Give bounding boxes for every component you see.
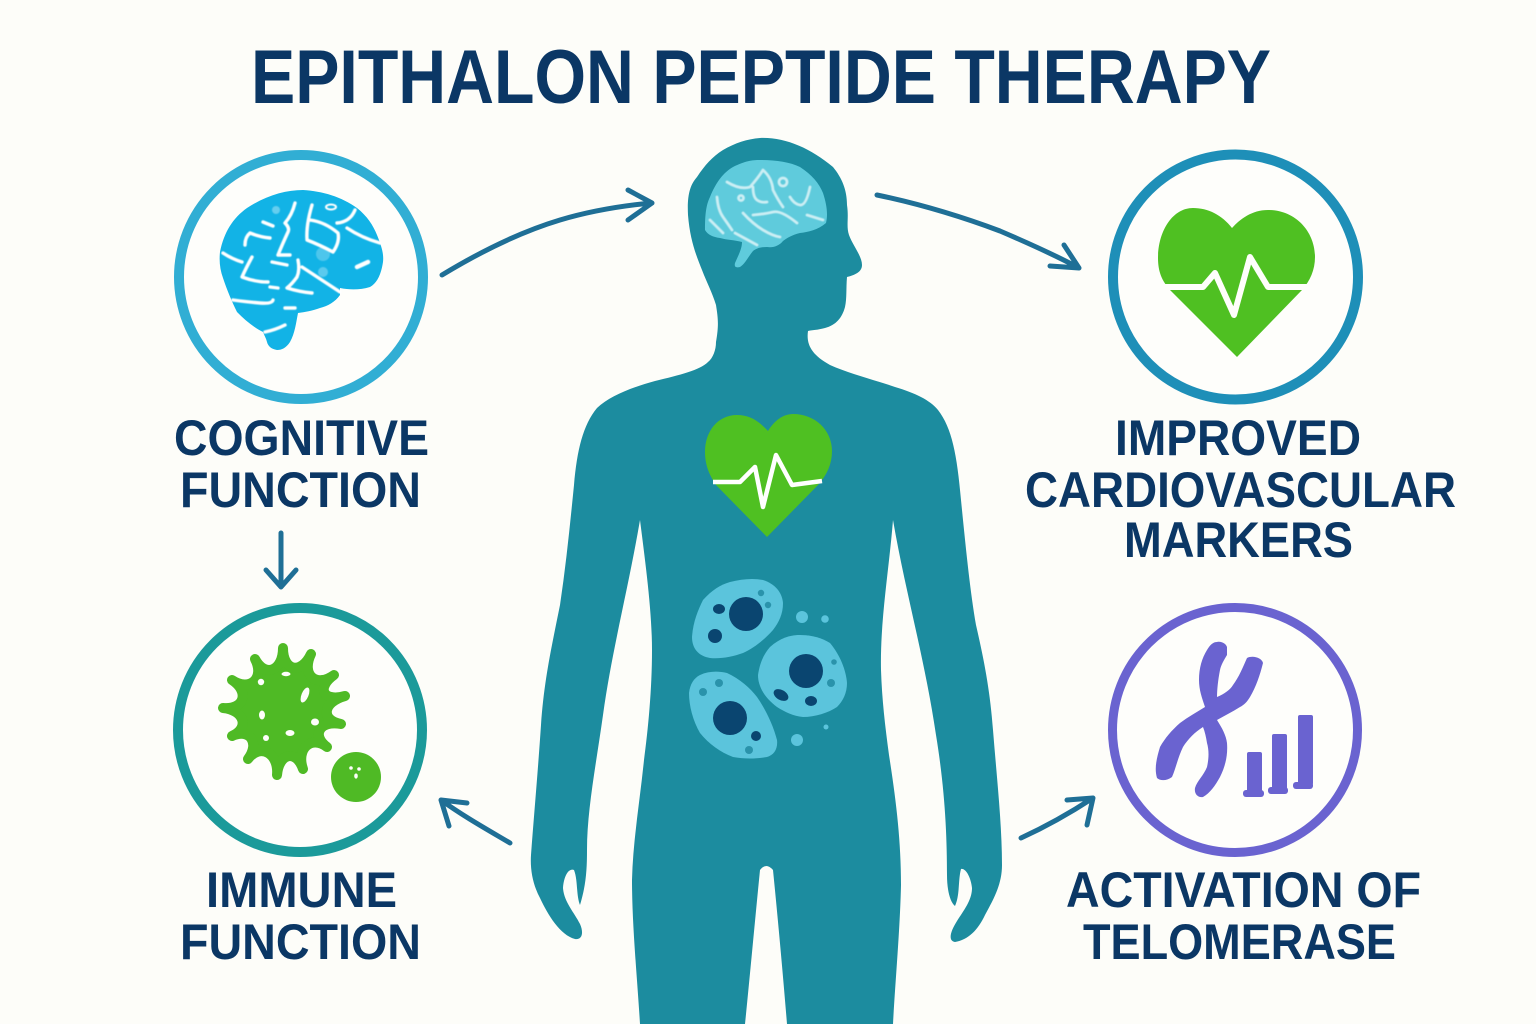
icon: body heart: [705, 414, 832, 537]
label: activation of telomerase: ACTIVATION OF: [1066, 862, 1421, 918]
label: improved cardiovascular markers: [1025, 410, 1456, 568]
label: activation of telomerase: [1066, 862, 1421, 970]
label: improved cardiovascular markers: MARKERS: [1124, 512, 1353, 568]
icon: virus: [223, 648, 381, 802]
label: activation of telomerase: TELOMERASE: [1083, 914, 1396, 970]
icon: brain: [220, 190, 383, 350]
cell lower: [689, 672, 777, 758]
arrow: cognitive to head: [442, 190, 652, 275]
label: cognitive function: FUNCTION: [180, 462, 421, 518]
label: improved cardiovascular markers: CARDIOVASCULAR: [1025, 462, 1456, 518]
icon: heart with pulse: [1158, 208, 1315, 357]
small cell: [331, 752, 381, 802]
label: immune function: [180, 862, 421, 970]
title: EPITHALON PEPTIDE THERAPY: [251, 35, 1271, 120]
panel: activation of telomerase: [1112, 608, 1358, 852]
label: improved cardiovascular markers: IMPROVED: [1115, 410, 1361, 466]
icon: telomere bars: [1243, 715, 1313, 797]
arrow: body to immune: [441, 800, 510, 843]
human body figure: [531, 138, 1002, 1024]
label: immune function: IMMUNE: [206, 862, 397, 918]
icon: head brain: [705, 160, 827, 267]
arrow: cognitive to immune: [266, 533, 296, 587]
ring: [1112, 608, 1358, 852]
label: cognitive function: COGNITIVE: [174, 410, 429, 466]
ring: [1113, 154, 1358, 400]
panel: improved cardiovascular markers: [1113, 154, 1358, 400]
ring: [179, 155, 423, 399]
arrow: body to telomerase: [1021, 798, 1093, 838]
floating particles: [791, 611, 829, 746]
icon: body cells: [689, 579, 847, 758]
cell right: [758, 635, 847, 717]
label: cognitive function: [174, 410, 429, 518]
ring: [178, 608, 422, 852]
arrow: head to cardiovascular: [877, 195, 1079, 268]
icon: chromosome: [1156, 642, 1263, 797]
panel: immune function: [178, 608, 422, 852]
label: immune function: FUNCTION: [180, 914, 421, 970]
cell upper: [692, 579, 783, 658]
panel: cognitive function: [179, 155, 423, 399]
body silhouette: [531, 138, 1002, 1024]
